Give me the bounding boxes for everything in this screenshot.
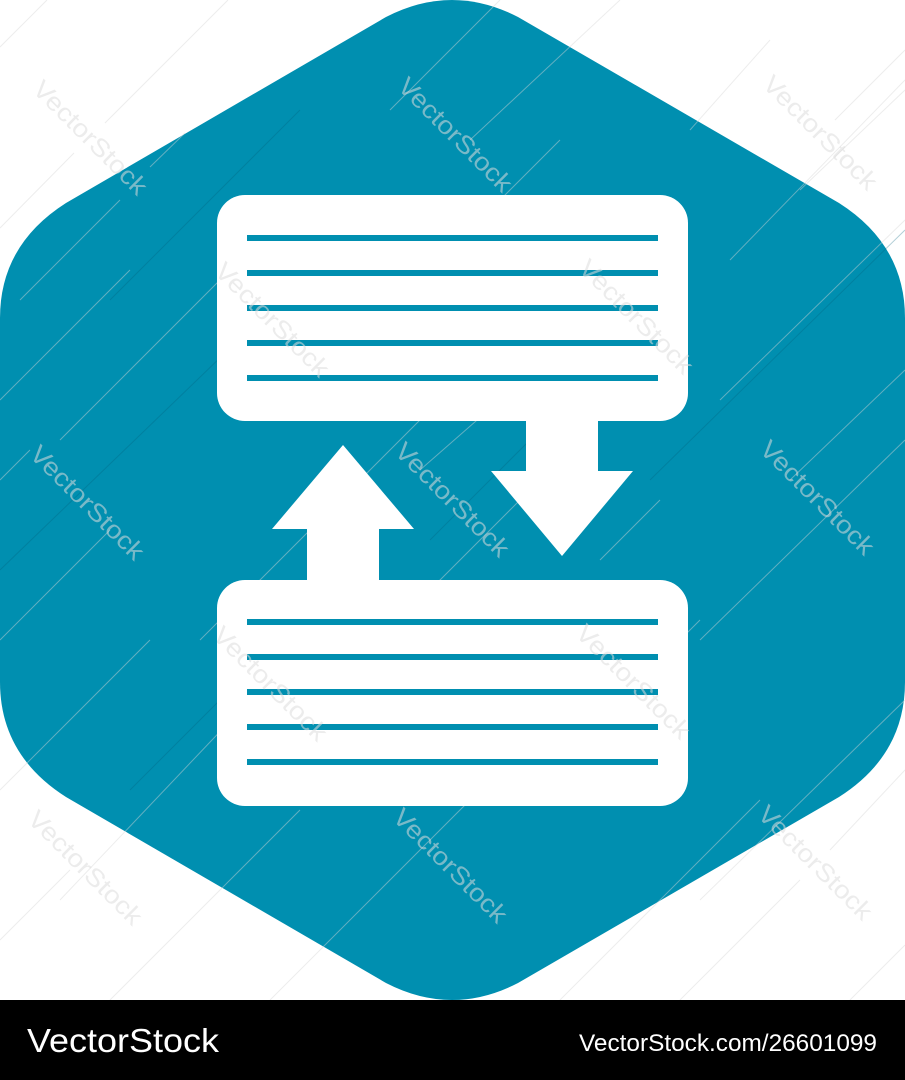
footer logo text: VectorStock: [27, 1022, 220, 1059]
watermarks: VectorStock: [752, 800, 878, 926]
watermarks: VectorStock: [207, 621, 333, 747]
arrow: down: [491, 419, 633, 556]
watermarks: VectorStock: [757, 70, 883, 196]
watermarks: VectorStock: [387, 803, 513, 929]
watermarks: VectorStock: [389, 437, 515, 563]
footer bar: [0, 1000, 905, 1080]
watermarks: VectorStock: [24, 440, 150, 566]
watermarks: VectorStock: [754, 435, 880, 561]
watermarks: VectorStock: [209, 257, 335, 383]
footer url text: VectorStock.com/26601099: [579, 1030, 877, 1057]
arrow: up: [272, 445, 414, 582]
bottom text panel: [217, 580, 688, 806]
watermarks: VectorStock: [27, 75, 153, 201]
top text panel: [217, 195, 688, 421]
watermarks: VectorStock: [573, 254, 699, 380]
watermarks: VectorStock: [570, 619, 696, 745]
watermarks: VectorStock: [22, 805, 148, 931]
watermarks: VectorStock: [392, 72, 518, 198]
watermarks: [22, 70, 883, 931]
